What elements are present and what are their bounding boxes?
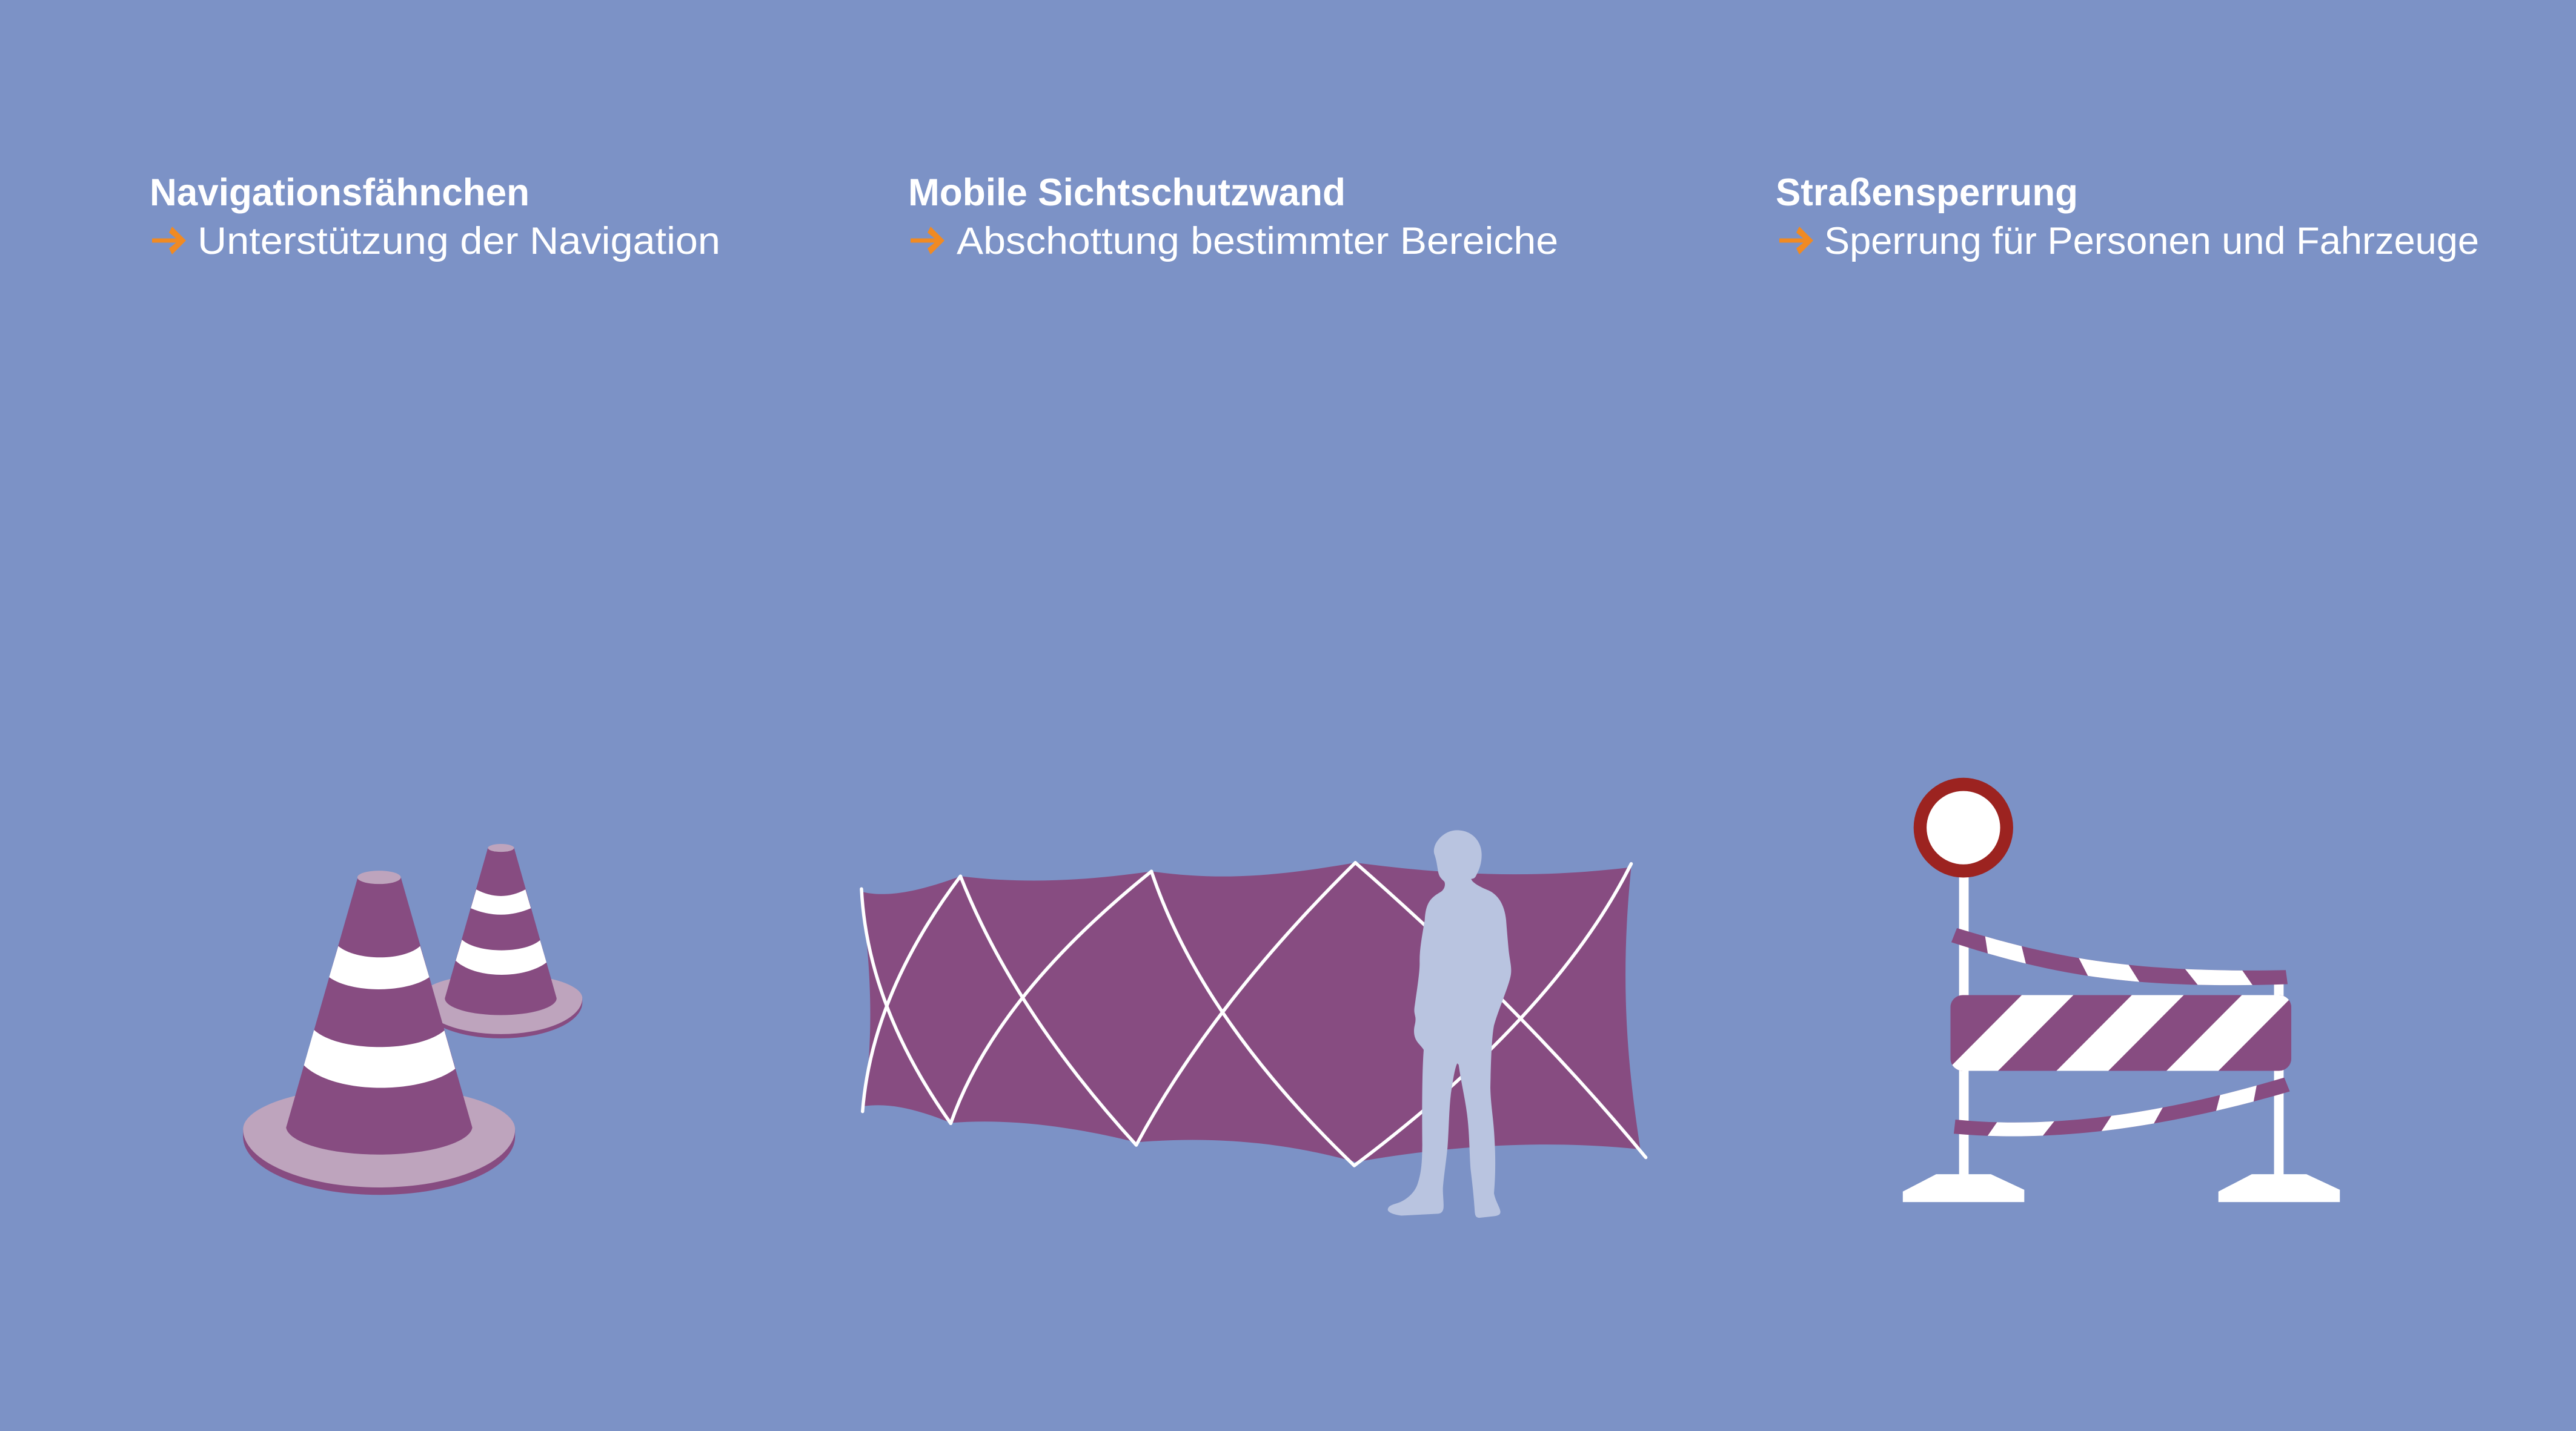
heading: Mobile Sichtschutzwand: [908, 171, 1346, 214]
heading: Navigationsfähnchen: [150, 171, 529, 214]
right base: [2219, 1174, 2340, 1202]
left pole: [1959, 875, 1968, 1176]
small cone: [420, 844, 582, 1038]
upper barrier tape: [1951, 928, 2288, 985]
frame struts: [861, 863, 1646, 1166]
fabric panel: [861, 863, 1641, 1162]
header: Straßensperrung: [1776, 171, 2479, 262]
icon: orange arrow: [1779, 227, 1813, 254]
large cone: [243, 871, 515, 1195]
right pole: [2274, 984, 2283, 1176]
description: Unterstützung der Navigation: [198, 220, 720, 262]
description: Sperrung für Personen und Fahrzeuge: [1824, 220, 2479, 262]
illustration: traffic cones: [243, 844, 582, 1195]
lower barrier tape: [1954, 1077, 2290, 1137]
left base: [1903, 1174, 2024, 1202]
description: Abschottung bestimmter Bereiche: [957, 220, 1558, 262]
header: Navigationsfähnchen: [150, 171, 720, 262]
person silhouette: [1388, 830, 1511, 1218]
icon: orange arrow: [911, 227, 944, 254]
illustration: road barrier: [1903, 778, 2340, 1202]
header: Mobile Sichtschutzwand: [908, 171, 1558, 262]
round prohibition sign: [1914, 778, 2013, 878]
striped barrier board: [1947, 995, 2294, 1071]
heading: Straßensperrung: [1776, 171, 2078, 214]
icon: orange arrow: [152, 227, 186, 254]
illustration: mobile privacy screen: [861, 830, 1646, 1218]
